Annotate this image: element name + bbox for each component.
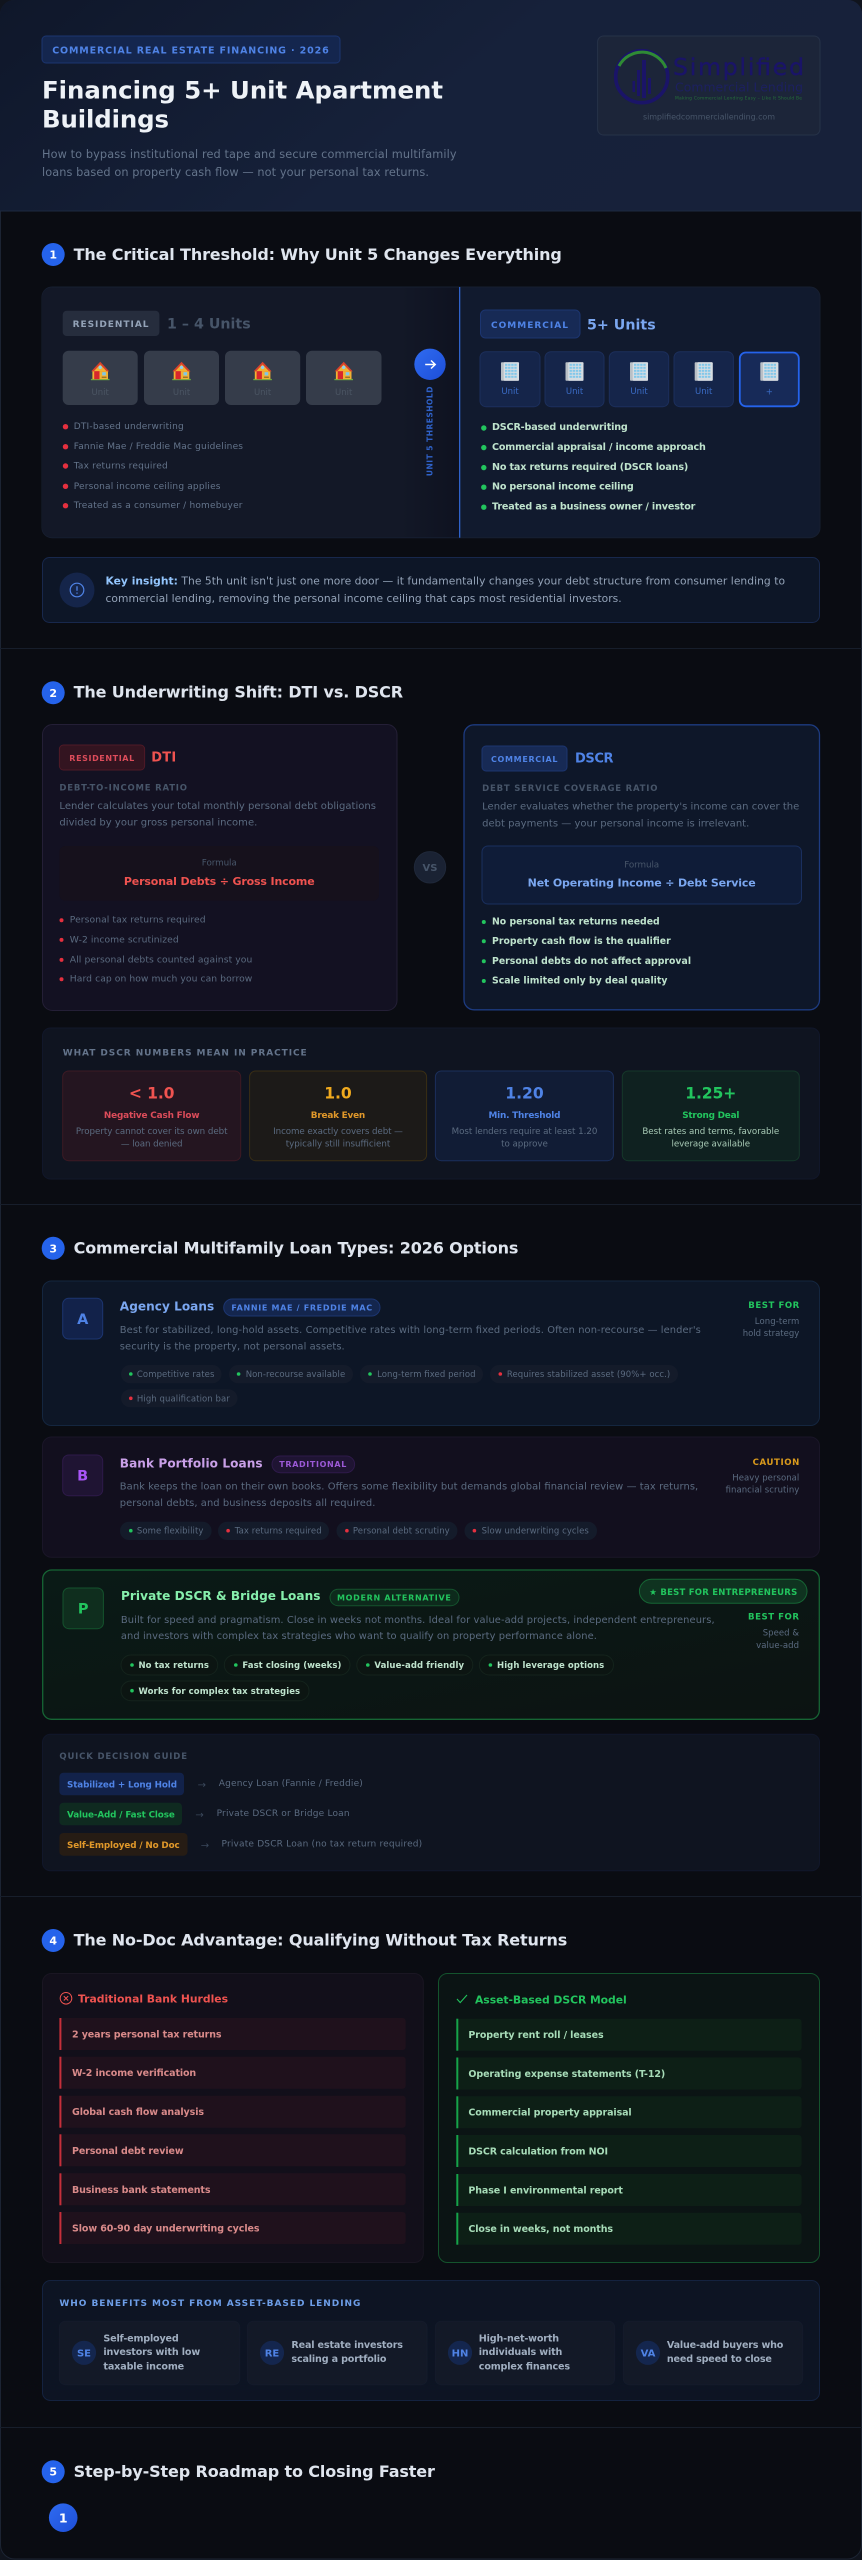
- benefit card: value-add buyers: [623, 2321, 803, 2385]
- DSCR model heading: Asset-Based DSCR Model: [475, 1993, 627, 2006]
- private chips: No tax returns: [138, 1661, 209, 1671]
- private title row: Private DSCR & Bridge Loans: [121, 1589, 320, 1603]
- hurdle rows: Slow 60-90 day underwriting cycles: [72, 2223, 260, 2234]
- commercial unit tiles: +: [766, 388, 773, 398]
- private description: Built for speed and pragmatism. Close in weeks not months. Ideal for value-add projects, independent entrepreneurs,: [121, 1615, 715, 1626]
- commercial unit tiles: Unit: [695, 387, 713, 397]
- benefit card: high-net-worth: complex finances: [479, 2362, 570, 2372]
- agency description: [120, 1325, 701, 1352]
- ribbon: best for entrepreneurs: [639, 1579, 807, 1603]
- agency chips: Requires stabilized asset (90%+ occ.): [507, 1370, 670, 1380]
- logo card: [598, 36, 820, 135]
- guide row: stabilized: →: [198, 1780, 206, 1791]
- agency best-for note: hold strategy: [743, 1329, 799, 1339]
- insight text: commercial lending, removing the personal income ceiling that caps most residential investors.: [106, 592, 622, 605]
- residential unit tiles: Unit: [335, 388, 353, 398]
- private best-for note: BEST FOR: [748, 1612, 799, 1622]
- badge B: B: [77, 1468, 88, 1484]
- hurdle rows: Business bank statements: [72, 2185, 211, 2196]
- card: 1.0: [250, 1071, 427, 1161]
- bank title row: TRADITIONAL: [279, 1460, 346, 1469]
- card: 1.20: [435, 1071, 613, 1161]
- header badge: [42, 36, 340, 63]
- subtitle: [42, 148, 457, 179]
- agency chips: Non-recourse available: [246, 1370, 345, 1380]
- commercial unit tiles: Unit: [566, 387, 584, 397]
- subtitle: How to bypass institutional red tape and secure commercial multifamily: [42, 148, 457, 161]
- key insight callout: [42, 558, 820, 622]
- private best-for note: Speed &: [763, 1629, 799, 1639]
- card: 1.0: typically still insufficient: [286, 1139, 391, 1149]
- residential unit tiles: Unit: [173, 388, 191, 398]
- DSCR model rows: Operating expense statements (T-12): [468, 2069, 665, 2080]
- section 2 heading: The Underwriting Shift: DTI vs. DSCR: [74, 682, 403, 702]
- DSCR tag: COMMERCIAL: [491, 755, 558, 764]
- badge A: A: [77, 1312, 89, 1328]
- agency title row: [120, 1299, 380, 1316]
- commercial unit tiles: Unit: [630, 387, 648, 397]
- private chips: [121, 1655, 614, 1701]
- commercial bullet list: Treated as a business owner / investor: [492, 502, 696, 512]
- residential unit tiles: [63, 351, 381, 405]
- commercial tag: [480, 310, 580, 338]
- guide row: stabilized: Agency Loan (Fannie / Freddie): [219, 1779, 363, 1789]
- benefit card: real estate investors: scaling a portfolio: [291, 2354, 387, 2365]
- commercial bullet list: No personal income ceiling: [492, 482, 634, 492]
- commercial bullet list: No tax returns required (DSCR loans): [492, 462, 688, 473]
- guide row: self-employed: Self-Employed / No Doc: [67, 1841, 180, 1851]
- card: 1.20: Most lenders require at least 1.20: [452, 1127, 597, 1137]
- private chips: Value-add friendly: [374, 1661, 464, 1671]
- DSCR description: Lender evaluates whether the property's income can cover the: [482, 802, 799, 813]
- threshold arrow divider: [414, 349, 446, 476]
- badge A: [63, 1298, 103, 1339]
- panel: asset-based DSCR model: [438, 1974, 820, 2262]
- residential bullet list: [63, 422, 243, 511]
- DSCR label: DSCR: [575, 752, 614, 767]
- bank caution note: Heavy personal: [732, 1474, 799, 1484]
- agency chips: [121, 1365, 678, 1407]
- section 1: critical threshold: [42, 243, 820, 622]
- bank title row: [120, 1456, 355, 1473]
- DSCR model rows: Close in weeks, not months: [468, 2224, 613, 2235]
- DSCR tag: [482, 746, 567, 771]
- header badge: COMMERCIAL REAL ESTATE FINANCING · 2026: [52, 45, 329, 56]
- residential side: [63, 311, 381, 511]
- logo wordmark: [673, 53, 804, 102]
- VS badge: [414, 852, 446, 883]
- card: below 1.0: Negative Cash Flow: [104, 1111, 200, 1121]
- private best-for note: [748, 1612, 799, 1651]
- commercial unit tiles: Unit: [501, 387, 519, 397]
- DTI description: divided by your gross personal income.: [59, 818, 257, 829]
- benefit card: real estate investors: RE: [265, 2348, 279, 2359]
- commercial side: [480, 310, 799, 512]
- residential unit count: 1 – 4 Units: [167, 317, 251, 333]
- private description: [121, 1615, 715, 1642]
- bank description: Bank keeps the loan on their own books. Offers some flexibility but demands global financial review — tax returns,: [120, 1482, 698, 1492]
- guide row: value-add: →: [195, 1810, 204, 1821]
- residential unit tiles: Unit: [254, 388, 272, 398]
- benefit card: value-add buyers: Value-add buyers who: [667, 2340, 784, 2351]
- benefit card: self-employed: investors with low: [103, 2347, 200, 2358]
- DTI formula box: Formula: [202, 859, 237, 869]
- threshold arrow divider: UNIT 5 THRESHOLD: [425, 387, 434, 476]
- quick decision guide: [42, 1734, 820, 1871]
- DSCR bullet list: Personal debts do not affect approval: [492, 956, 691, 967]
- loan card B: bank portfolio: [42, 1437, 820, 1557]
- benefit card: real estate investors: [247, 2321, 427, 2385]
- logo wordmark: Commercial Lending: [675, 80, 803, 94]
- bank description: [120, 1482, 698, 1509]
- card: 1.0: Income exactly covers debt —: [273, 1127, 403, 1137]
- DTI bullet list: Personal tax returns required: [70, 915, 206, 926]
- bank chips: [120, 1522, 597, 1540]
- hurdle rows: [59, 2018, 406, 2244]
- DSCR model rows: Commercial property appraisal: [468, 2108, 632, 2119]
- hurdles heading: Traditional Bank Hurdles: [78, 1993, 228, 2006]
- DSCR bullet list: [482, 917, 691, 987]
- DSCR formula box: [482, 846, 802, 904]
- commercial tag: COMMERCIAL: [491, 321, 568, 331]
- guide row: stabilized: Stabilized + Long Hold: [67, 1780, 177, 1790]
- badge P: [63, 1588, 103, 1629]
- residential tag: [63, 311, 159, 336]
- section 2 heading: 2: [49, 687, 57, 700]
- residential bullet list: Personal income ceiling applies: [74, 482, 221, 492]
- commercial bullet list: Commercial appraisal / income approach: [492, 442, 706, 453]
- commercial bullet list: DSCR-based underwriting: [492, 422, 628, 433]
- private description: and investors with complex tax strategies who want to qualify on property performance alone.: [121, 1631, 597, 1642]
- section 5: roadmap: [42, 2460, 435, 2532]
- benefit card: real estate investors: Real estate investors: [291, 2340, 403, 2351]
- DTI label: DTI: [151, 751, 176, 766]
- commercial unit tiles: [480, 352, 799, 407]
- private chips: Fast closing (weeks): [242, 1661, 342, 1671]
- insight text: Key insight: The 5th unit isn't just one more door — it fundamentally changes your debt structure from consumer lending to: [106, 574, 785, 588]
- section 3: loan types: [42, 1237, 819, 1871]
- bank description: personal debts, and business deposits all required.: [120, 1498, 375, 1509]
- card: 1.25+: leverage available: [672, 1139, 750, 1149]
- DSCR bullet list: No personal tax returns needed: [492, 917, 660, 928]
- card: below 1.0: < 1.0: [129, 1084, 175, 1102]
- residential bullet list: DTI-based underwriting: [74, 422, 184, 432]
- private title row: MODERN ALTERNATIVE: [337, 1593, 451, 1602]
- private chips: High leverage options: [497, 1661, 604, 1671]
- card: 1.0: Break Even: [311, 1111, 365, 1121]
- agency best-for note: [743, 1301, 800, 1339]
- benefit card: self-employed: taxable income: [103, 2362, 185, 2372]
- section 1 heading: 1: [49, 248, 57, 262]
- agency title row: Agency Loans: [120, 1300, 214, 1314]
- loan card P: private DSCR and bridge: [43, 1570, 819, 1719]
- DTI bullet list: All personal debts counted against you: [70, 954, 252, 965]
- DTI description: Lender calculates your total monthly personal debt obligations: [59, 801, 376, 812]
- residential tag: RESIDENTIAL: [73, 320, 149, 330]
- loan card A: agency: [42, 1281, 820, 1426]
- section 4: no-doc advantage: [42, 1929, 819, 2400]
- DSCR model rows: Phase I environmental report: [468, 2185, 623, 2196]
- subtitle: loans based on property cash flow — not your personal tax returns.: [42, 166, 429, 179]
- guide row: value-add: Value-Add / Fast Close: [67, 1810, 175, 1820]
- logo wordmark: Simplified: [673, 53, 804, 81]
- DSCR bullet list: Property cash flow is the qualifier: [492, 936, 671, 947]
- main title: Financing 5+ Unit Apartment: [42, 75, 443, 104]
- main title: [42, 75, 443, 134]
- DTI sub heading: DEBT-TO-INCOME RATIO: [59, 783, 187, 793]
- section 4 heading: The No-Doc Advantage: Qualifying Without Tax Returns: [74, 1931, 567, 1950]
- section 3 heading: Commercial Multifamily Loan Types: 2026 Options: [74, 1238, 518, 1258]
- section 5 heading: 5: [49, 2466, 57, 2479]
- benefit card: high-net-worth: [435, 2321, 615, 2385]
- hurdle rows: Global cash flow analysis: [72, 2107, 204, 2118]
- agency description: Best for stabilized, long-hold assets. Competitive rates with long-term fixed periods. Often non-recourse — lender's: [120, 1325, 701, 1336]
- card: 1.25+: Best rates and terms, favorable: [642, 1127, 779, 1137]
- benefit card: self-employed: Self-employed: [103, 2334, 179, 2344]
- benefit card: value-add buyers: VA: [641, 2348, 656, 2359]
- logo url: simplifiedcommerciallending.com: [643, 112, 775, 122]
- benefit card: high-net-worth: High-net-worth: [479, 2334, 559, 2344]
- bank caution note: [726, 1458, 799, 1496]
- badge B: [63, 1455, 103, 1496]
- main title: Buildings: [42, 105, 169, 134]
- benefit card: high-net-worth: individuals with: [479, 2347, 563, 2358]
- card: below 1.0: [63, 1071, 241, 1161]
- commercial bullet list: [481, 422, 706, 512]
- residential bullet list: Fannie Mae / Freddie Mac guidelines: [74, 442, 243, 452]
- commercial unit count: 5+ Units: [587, 318, 656, 334]
- DSCR sub heading: DEBT SERVICE COVERAGE RATIO: [482, 784, 658, 794]
- private chips: Works for complex tax strategies: [138, 1687, 300, 1697]
- benefit card: self-employed: SE: [77, 2348, 91, 2359]
- VS badge: VS: [423, 863, 437, 874]
- icon: info circle: [60, 572, 94, 608]
- benefit card: high-net-worth: HN: [452, 2348, 468, 2359]
- DSCR description: debt payments — your personal income is irrelevant.: [482, 818, 749, 829]
- section 5 heading: Step-by-Step Roadmap to Closing Faster: [74, 2462, 435, 2481]
- DTI formula box: [59, 846, 379, 901]
- bank chips: Personal debt scrutiny: [353, 1527, 450, 1537]
- agency description: security is the property, not personal assets.: [120, 1342, 345, 1352]
- who benefits title: WHO BENEFITS MOST FROM ASSET-BASED LENDING: [59, 2299, 360, 2309]
- card: 1.25+: [622, 1071, 799, 1161]
- DSCR formula box: Formula: [624, 860, 659, 870]
- threshold comparison panel: [42, 287, 820, 538]
- logo mark: skyline in ring: [616, 51, 668, 103]
- DSCR model rows: DSCR calculation from NOI: [468, 2146, 608, 2157]
- private best-for note: value-add: [756, 1641, 799, 1651]
- benefit card: value-add buyers: need speed to close: [667, 2354, 772, 2365]
- guide row: self-employed: Private DSCR Loan (no tax return required): [222, 1839, 422, 1849]
- hurdle rows: 2 years personal tax returns: [72, 2029, 222, 2040]
- benefit card: self-employed: [59, 2321, 240, 2385]
- bank chips: Tax returns required: [234, 1527, 322, 1537]
- DSCR model rows: [456, 2019, 802, 2245]
- agency chips: Competitive rates: [137, 1370, 215, 1380]
- hurdle rows: W-2 income verification: [72, 2068, 196, 2079]
- card: 1.20: to approve: [501, 1139, 548, 1149]
- card: below 1.0: — loan denied: [121, 1139, 182, 1149]
- section 4 heading: 4: [49, 1934, 57, 1948]
- card: 1.20: Min. Threshold: [488, 1111, 560, 1121]
- bank title row: Bank Portfolio Loans: [120, 1456, 263, 1470]
- badge P: P: [78, 1602, 89, 1618]
- DTI bullet list: Hard cap on how much you can borrow: [70, 974, 253, 985]
- DTI bullet list: [60, 915, 253, 985]
- DSCR description: [482, 802, 799, 829]
- DSCR card: [464, 725, 820, 1010]
- DSCR numbers title: WHAT DSCR NUMBERS MEAN IN PRACTICE: [63, 1048, 307, 1058]
- step 1 marker: 1: [59, 2510, 68, 2525]
- card: 1.25+: Strong Deal: [682, 1111, 739, 1121]
- guide row: self-employed: [59, 1833, 422, 1856]
- agency title row: FANNIE MAE / FREDDIE MAC: [231, 1303, 372, 1312]
- private title row: [121, 1589, 459, 1606]
- header: [0, 0, 862, 212]
- DTI tag: RESIDENTIAL: [69, 754, 134, 763]
- step 1 marker: [49, 2503, 78, 2532]
- residential unit tiles: Unit: [92, 388, 110, 398]
- agency chips: Long-term fixed period: [377, 1370, 476, 1380]
- panel: who benefits most: [42, 2280, 820, 2400]
- bank chips: Slow underwriting cycles: [482, 1527, 589, 1537]
- DSCR model rows: Property rent roll / leases: [468, 2030, 604, 2041]
- DTI card: [42, 724, 397, 1010]
- card: 1.0: 1.0: [324, 1084, 352, 1102]
- insight text: [106, 574, 785, 605]
- residential bullet list: Tax returns required: [73, 462, 168, 472]
- logo wordmark: Making Commercial Lending Easy – Like It Should Be: [675, 96, 802, 102]
- guide row: value-add: [59, 1803, 350, 1825]
- DTI formula box: Personal Debts ÷ Gross Income: [124, 875, 315, 888]
- residential bullet list: Treated as a consumer / homebuyer: [73, 501, 243, 511]
- guide title: QUICK DECISION GUIDE: [59, 1752, 187, 1762]
- DSCR numbers panel: [42, 1028, 820, 1179]
- agency chips: High qualification bar: [137, 1394, 230, 1404]
- bank caution note: CAUTION: [753, 1458, 799, 1468]
- card: below 1.0: Property cannot cover its own debt: [76, 1127, 228, 1137]
- bank chips: Some flexibility: [137, 1527, 203, 1537]
- agency best-for note: Long-term: [755, 1317, 799, 1327]
- DTI description: [59, 801, 376, 829]
- guide row: value-add: Private DSCR or Bridge Loan: [217, 1809, 350, 1819]
- DSCR formula box: Net Operating Income ÷ Debt Service: [528, 876, 756, 889]
- panel: traditional bank hurdles: [42, 1974, 423, 2262]
- card: 1.25+: 1.25+: [685, 1084, 736, 1102]
- DTI tag: [59, 745, 145, 770]
- ribbon: best for entrepreneurs: ★ BEST FOR ENTREPRENEURS: [649, 1588, 797, 1598]
- agency best-for note: BEST FOR: [748, 1301, 800, 1311]
- section 3 heading: 3: [49, 1242, 57, 1255]
- guide row: stabilized: [59, 1773, 363, 1795]
- bank caution note: financial scrutiny: [726, 1486, 799, 1496]
- card: 1.20: 1.20: [505, 1084, 544, 1102]
- section 1 heading: The Critical Threshold: Why Unit 5 Changes Everything: [74, 245, 562, 264]
- DSCR bullet list: Scale limited only by deal quality: [492, 976, 667, 987]
- hurdle rows: Personal debt review: [72, 2146, 184, 2157]
- DTI bullet list: W-2 income scrutinized: [70, 934, 179, 945]
- guide row: self-employed: →: [201, 1840, 209, 1851]
- section 2: underwriting shift: [42, 681, 819, 1179]
